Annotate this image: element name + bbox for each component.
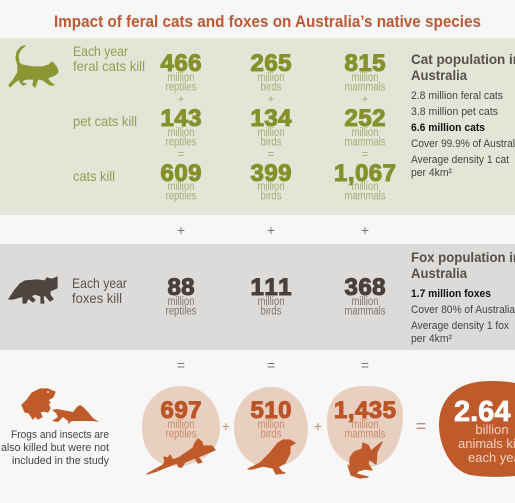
column: birds: birds	[260, 82, 282, 94]
stat: birds: million	[258, 296, 284, 308]
column: mammals: million	[352, 127, 378, 139]
row labels: feral cats kill	[73, 58, 145, 74]
plus signs between panels: +	[361, 222, 369, 238]
column: mammals: 815	[344, 50, 386, 77]
blob: grand total: 2.64	[454, 396, 510, 428]
icon: fox	[9, 277, 57, 303]
text: fox population: per 4km²	[411, 333, 452, 345]
column: mammals: million	[352, 181, 378, 193]
stat: reptiles: million	[168, 296, 194, 308]
note: frogs and insects	[1, 429, 109, 467]
note: frogs and insects: Frogs and insects are	[11, 429, 109, 441]
equals signs: =	[177, 357, 185, 373]
title: Impact of feral cats and foxes on Australia’s native species	[54, 13, 481, 31]
equals signs: =	[267, 357, 275, 373]
column: birds: million	[258, 72, 284, 84]
panel: foxes	[0, 244, 515, 350]
text: cat population: Australia	[411, 68, 467, 83]
plus signs between panels	[177, 222, 369, 238]
plus signs between panels: +	[177, 222, 185, 238]
column: mammals: mammals	[344, 136, 386, 148]
column: birds: million	[258, 127, 284, 139]
blob: reptiles total: 697	[160, 397, 202, 424]
icon: frog	[22, 389, 55, 419]
icon: cat	[9, 46, 58, 87]
stat: reptiles: reptiles	[166, 306, 197, 318]
text: cat population: 2.8 million feral cats	[411, 90, 503, 102]
column: reptiles: 609	[160, 160, 202, 187]
row labels: Each year	[73, 43, 128, 59]
icon: lizard	[147, 439, 215, 474]
column: reptiles	[160, 50, 202, 202]
blob: mammals total: million	[352, 419, 378, 431]
column: reptiles: 143	[160, 105, 202, 132]
blob: reptiles total: reptiles	[166, 428, 197, 440]
text: fox population	[411, 250, 515, 345]
panel: cats	[0, 38, 515, 215]
column: mammals: 1,067	[334, 160, 396, 187]
blob: mammals total: 1,435	[334, 397, 396, 424]
row labels: pet cats kill	[73, 113, 137, 129]
blob: reptiles total: million	[168, 419, 194, 431]
text: fox population: 1.7 million foxes	[411, 288, 491, 300]
blob: birds total: 510	[250, 397, 292, 424]
column: reptiles: reptiles	[166, 190, 197, 202]
row labels: cats kill	[73, 168, 115, 184]
column: reptiles: 466	[160, 50, 202, 77]
text: fox population: Average density 1 fox	[411, 320, 509, 332]
column: reptiles: +	[178, 94, 185, 106]
icon: bilby	[348, 442, 382, 478]
column: mammals: +	[362, 94, 369, 106]
text: each year foxes kill	[72, 275, 127, 306]
column: birds: birds	[260, 136, 282, 148]
plus signs between panels: +	[267, 222, 275, 238]
text: each year foxes kill: foxes kill	[72, 290, 122, 306]
stat: reptiles	[166, 274, 197, 318]
blob: birds total	[234, 387, 308, 474]
column: reptiles: million	[168, 127, 194, 139]
column: mammals	[334, 50, 396, 202]
column: reptiles: =	[178, 149, 185, 161]
column: mammals: million	[352, 72, 378, 84]
column: reptiles: reptiles	[166, 82, 197, 94]
icon: cricket	[52, 405, 99, 425]
blob: grand total: billion	[475, 422, 509, 437]
column: birds: 399	[250, 160, 292, 187]
operator: +	[314, 418, 322, 434]
column: birds	[250, 50, 292, 202]
blob: birds total: birds	[260, 428, 282, 440]
column: mammals: 252	[344, 105, 386, 132]
column: birds: 265	[250, 50, 292, 77]
column: birds: =	[268, 149, 275, 161]
column: reptiles: million	[168, 72, 194, 84]
blob: mammals total	[327, 386, 403, 478]
stat: birds	[250, 274, 292, 318]
row labels	[73, 43, 145, 184]
column: mammals: mammals	[344, 190, 386, 202]
operator: +	[222, 418, 230, 434]
stat: mammals: mammals	[344, 306, 386, 318]
stat: mammals: 368	[344, 274, 386, 301]
column: birds: +	[268, 94, 275, 106]
column: reptiles: reptiles	[166, 136, 197, 148]
note: frogs and insects: included in the study	[12, 455, 109, 467]
stat: mammals: million	[352, 296, 378, 308]
operator: =	[416, 416, 426, 436]
column: birds: 134	[250, 105, 292, 132]
stat: mammals	[344, 274, 386, 318]
text: fox population: Australia	[411, 266, 467, 281]
blob: mammals total: mammals	[344, 428, 386, 440]
text: cat population: Average density 1 cat	[411, 154, 509, 166]
text: cat population: per 4km²	[411, 167, 452, 179]
blob: grand total	[439, 381, 515, 477]
equals signs	[177, 357, 369, 373]
stat: birds: 111	[250, 274, 292, 301]
text: cat population: 6.6 million cats	[411, 122, 485, 134]
text: cat population	[411, 52, 515, 179]
column: mammals: =	[362, 149, 369, 161]
icon: bird	[248, 440, 295, 474]
text: cat population: 3.8 million pet cats	[411, 106, 498, 118]
column: birds: million	[258, 181, 284, 193]
column: mammals: mammals	[344, 82, 386, 94]
stat: reptiles: 88	[168, 274, 194, 301]
note: frogs and insects: also killed but were not	[1, 442, 109, 454]
column: reptiles: million	[168, 181, 194, 193]
column: birds: birds	[260, 190, 282, 202]
equals signs: =	[361, 357, 369, 373]
blob: birds total: million	[258, 419, 284, 431]
stat: birds: birds	[260, 306, 282, 318]
text: each year foxes kill: Each year	[72, 275, 127, 291]
blob: reptiles total	[142, 386, 220, 474]
